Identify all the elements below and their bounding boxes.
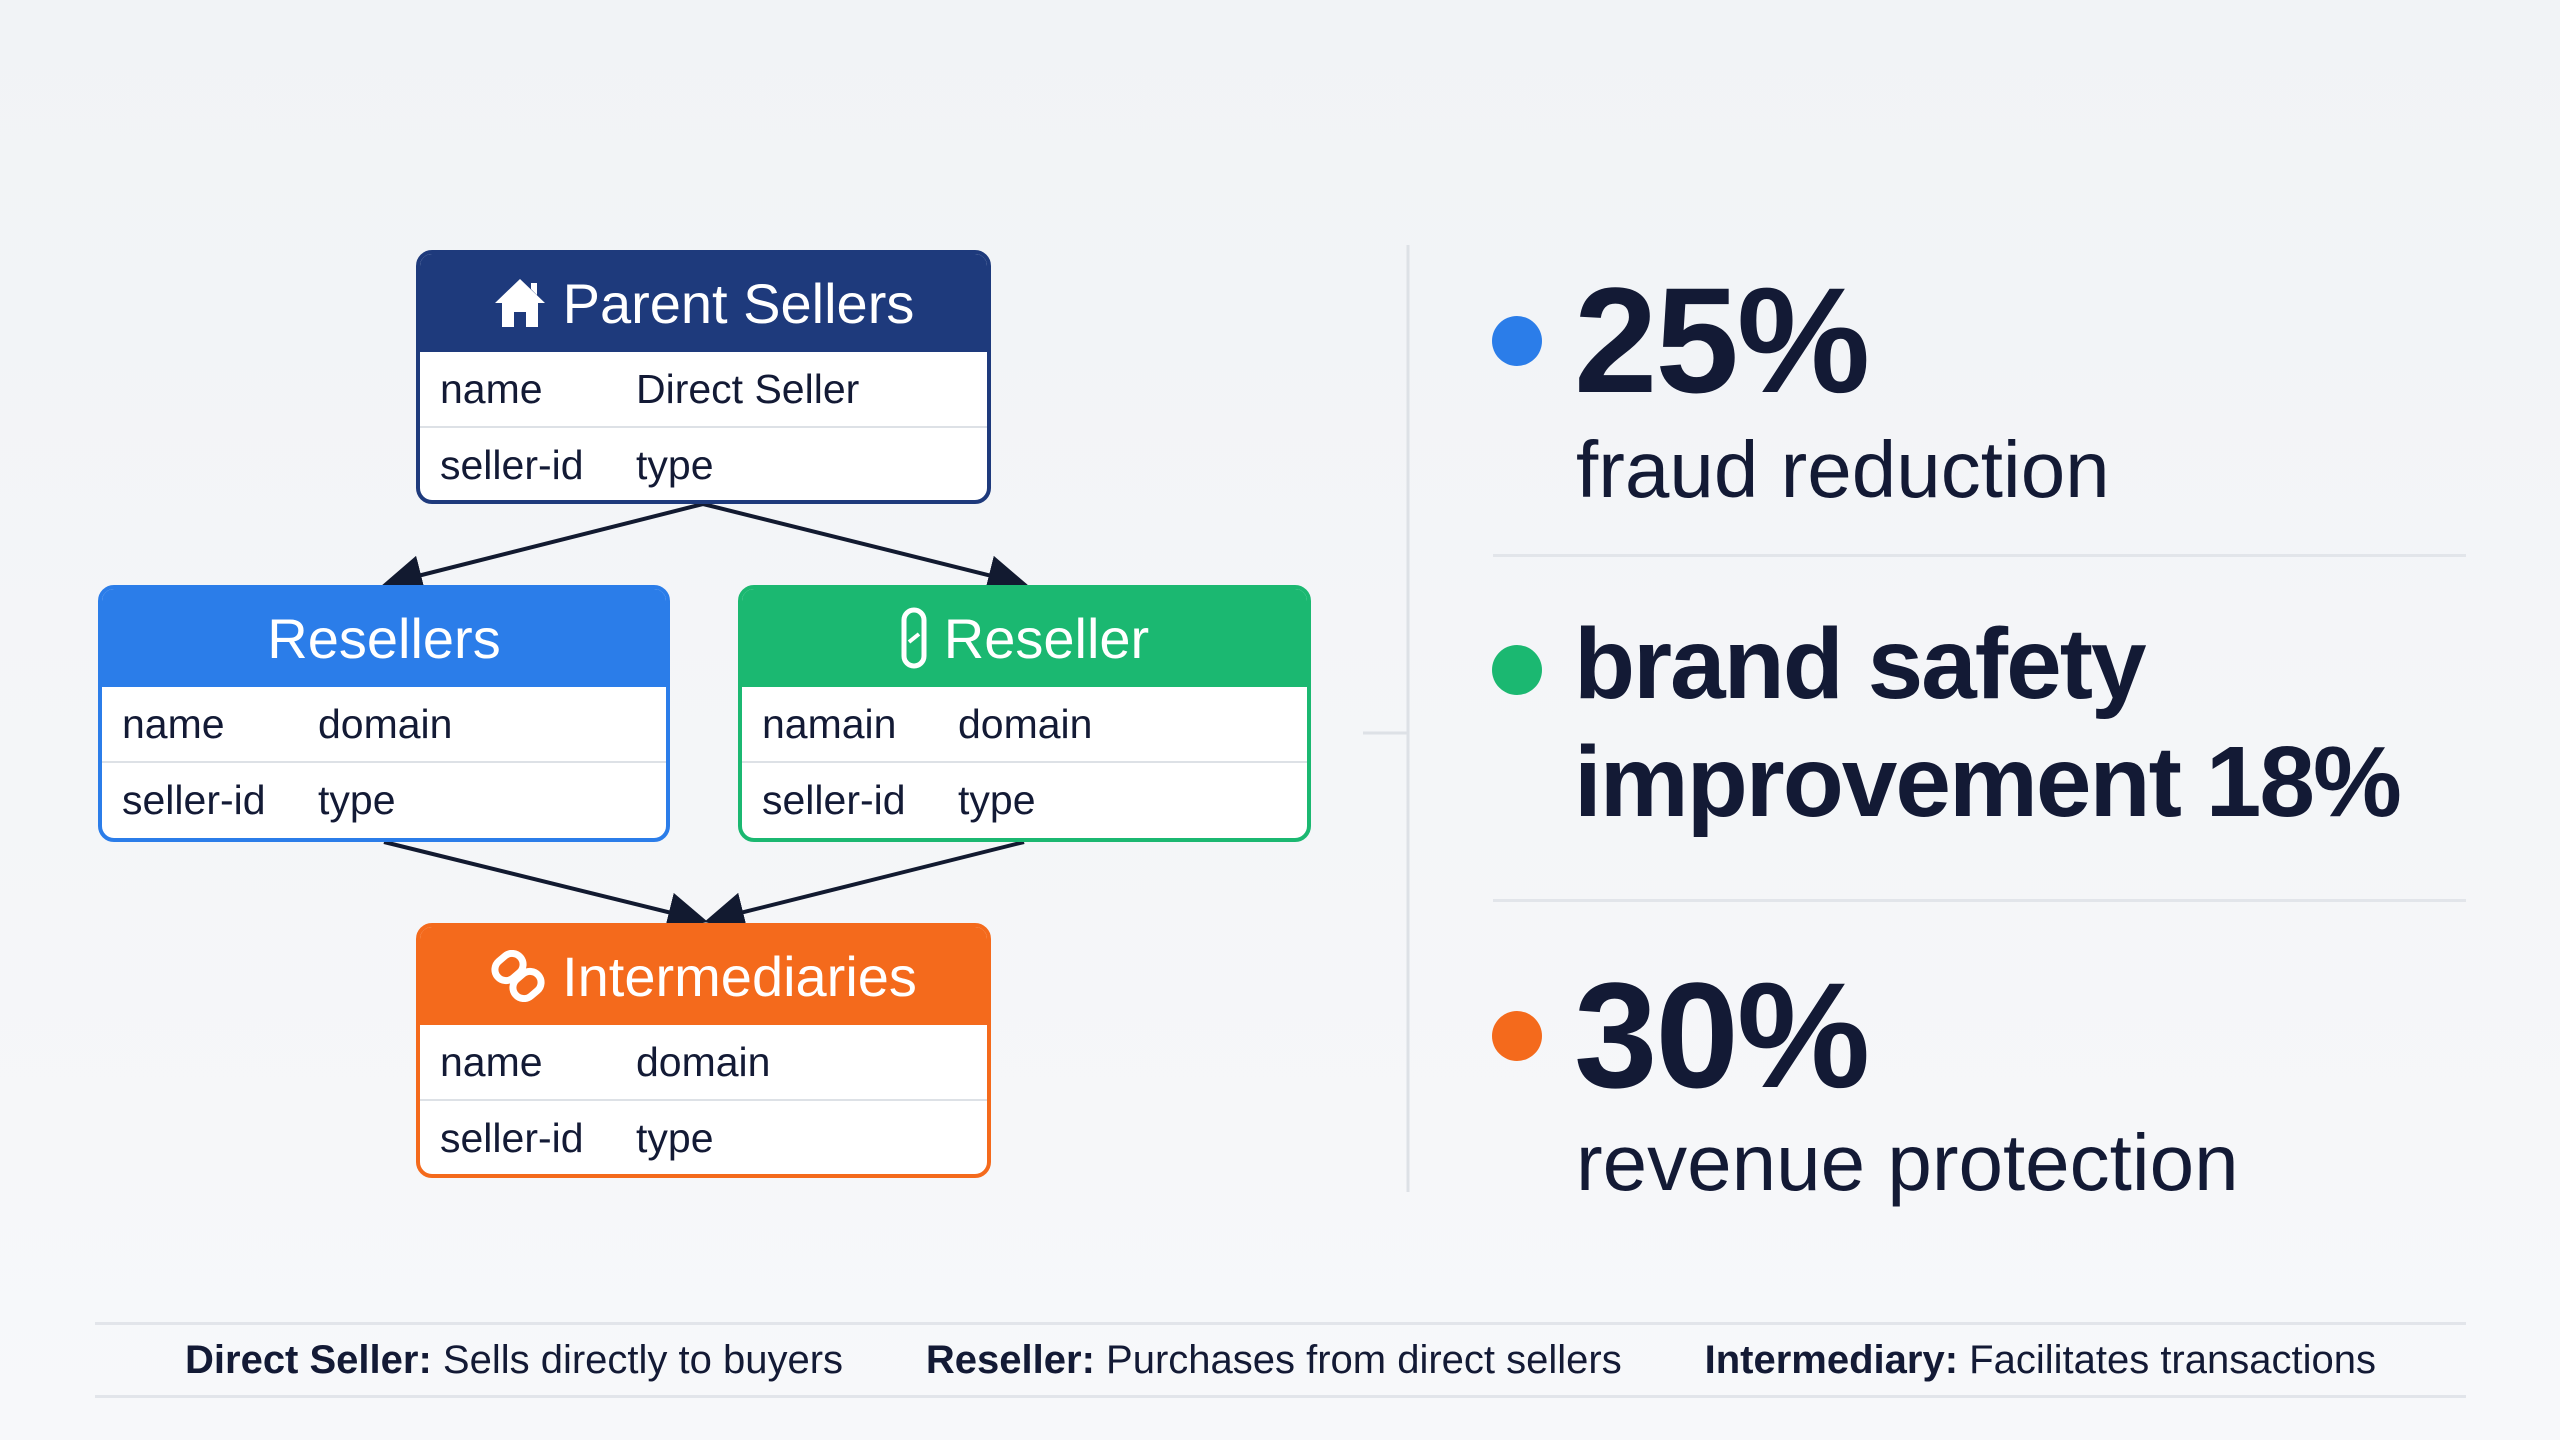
stat: brand safety: brand safety xyxy=(1574,608,2145,720)
stat: 25% fraud reduction: fraud reduction xyxy=(1576,425,2110,514)
heading: parent sellers xyxy=(420,254,987,352)
panel: intermediaries: name xyxy=(440,1038,543,1084)
panel: reseller: namain xyxy=(762,700,896,746)
panel: parent sellers xyxy=(416,250,991,504)
panel: resellers: seller-id xyxy=(122,776,266,822)
panel: intermediaries: seller-id xyxy=(440,1114,584,1160)
heading: reseller: Reseller xyxy=(944,606,1149,670)
heading: resellers xyxy=(102,589,666,687)
panel: parent sellers: type xyxy=(636,442,714,488)
heading: reseller xyxy=(742,589,1307,687)
stat: 25% fraud reduction: 25% xyxy=(1574,256,1868,424)
panel: intermediaries xyxy=(416,923,991,1178)
stat: 30% revenue protection xyxy=(1492,951,2239,1207)
panel: intermediaries: type xyxy=(636,1114,714,1160)
panel: resellers: domain xyxy=(318,700,452,746)
panel: reseller: type xyxy=(958,776,1036,822)
stat: brand safety: improvement 18% xyxy=(1574,726,2400,838)
panel: reseller xyxy=(738,585,1311,842)
stat: 25% fraud reduction xyxy=(1492,256,2110,514)
panel: resellers: name xyxy=(122,700,225,746)
heading: intermediaries: Intermediaries xyxy=(562,944,917,1008)
panel: parent sellers: Direct Seller xyxy=(636,366,859,412)
heading: resellers: Resellers xyxy=(267,606,501,670)
stat: brand safety xyxy=(1492,608,2400,838)
heading: intermediaries xyxy=(420,927,987,1025)
stat: 30% revenue protection: revenue protection xyxy=(1576,1118,2239,1207)
stat: 30% revenue protection: 30% xyxy=(1574,951,1868,1119)
footer legend xyxy=(95,1322,2466,1398)
panel: intermediaries: domain xyxy=(636,1038,770,1084)
footer legend: Intermediary: Facilitates transactions xyxy=(1705,1338,2376,1382)
heading: parent sellers: Parent Sellers xyxy=(563,272,914,334)
panel: parent sellers: seller-id xyxy=(440,442,584,488)
panel: reseller: domain xyxy=(958,700,1092,746)
panel: parent sellers: name xyxy=(440,366,543,412)
panel: reseller: seller-id xyxy=(762,776,906,822)
footer legend: Reseller: Purchases from direct sellers xyxy=(926,1338,1622,1382)
panel: resellers: type xyxy=(318,776,396,822)
panel: resellers xyxy=(98,585,670,842)
footer legend: Direct Seller: Sells directly to buyers xyxy=(185,1338,843,1382)
